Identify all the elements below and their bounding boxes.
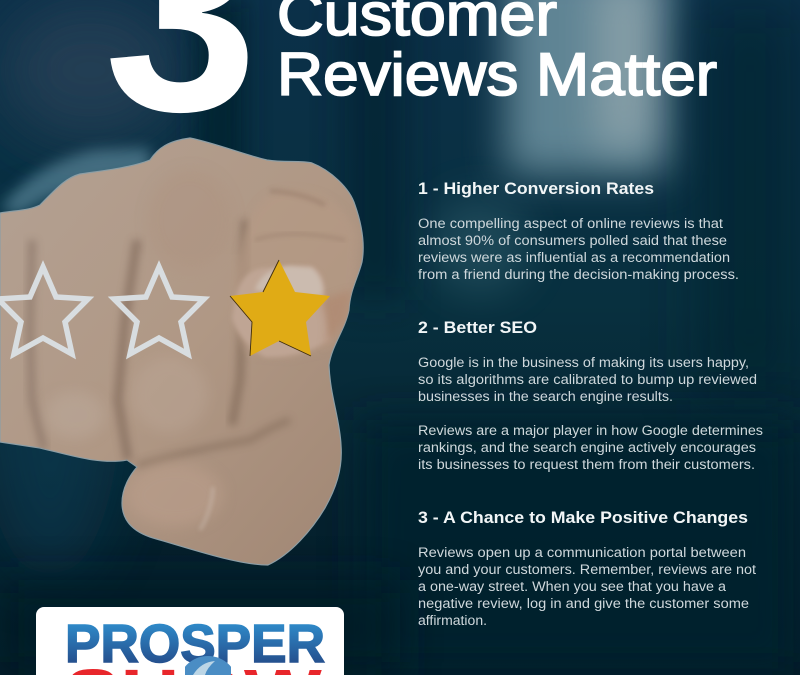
fingernail — [232, 266, 330, 357]
body text 1: from a friend during the decision-making process. — [418, 267, 739, 282]
body text 3: affirmation. — [418, 613, 487, 628]
body text 2: Reviews are a major player in how Google determines — [418, 423, 763, 438]
finger shading — [30, 170, 358, 530]
body text 2: Google is in the business of making its users happy, — [418, 355, 749, 370]
body text 1 — [418, 216, 739, 282]
title: Reviews Matter — [277, 41, 717, 108]
heading 3: 3 - A Chance to Make Positive Changes — [418, 508, 748, 527]
body text 2 — [418, 355, 763, 472]
index finger pad — [237, 224, 358, 349]
body text 1: reviews were as influential as a recommendation — [418, 250, 730, 265]
hand pointing at viewer — [0, 138, 363, 565]
thumb knuckle — [137, 471, 217, 522]
body text 2: its businesses to request them from their customers. — [418, 457, 755, 472]
section 2: better SEO — [418, 318, 763, 472]
body text 1: almost 90% of consumers polled said that these — [418, 233, 727, 248]
section 3: a chance to make positive changes — [418, 508, 756, 628]
body text 3 — [418, 545, 756, 628]
logo card: Prosper Show — [36, 607, 344, 675]
body text 3: you and your customers. Remember, reviews are not — [418, 562, 756, 577]
hand silhouette — [0, 138, 363, 565]
icon: outline star middle — [114, 267, 204, 354]
body text 2: so its algorithms are calibrated to bump up reviewed — [418, 372, 757, 387]
body text 2: businesses in the search engine results. — [418, 389, 673, 404]
heading 1: 1 - Higher Conversion Rates — [418, 179, 654, 198]
heading 2: 2 - Better SEO — [418, 318, 537, 337]
body text 3: a one-way street. When you see that you have a — [418, 579, 727, 594]
icon: filled gold star — [230, 260, 330, 356]
body text 2: rankings, and the search engine actively encourages — [418, 440, 756, 455]
body text 3: Reviews open up a communication portal between — [418, 545, 746, 560]
section 1: higher conversion rates — [418, 179, 739, 282]
icon: outline star left — [0, 267, 88, 354]
logo globe — [185, 656, 231, 675]
body text 1: One compelling aspect of online reviews is that — [418, 216, 723, 231]
body text 3: negative review, log in and give the customer some — [418, 596, 749, 611]
title — [279, 0, 717, 96]
